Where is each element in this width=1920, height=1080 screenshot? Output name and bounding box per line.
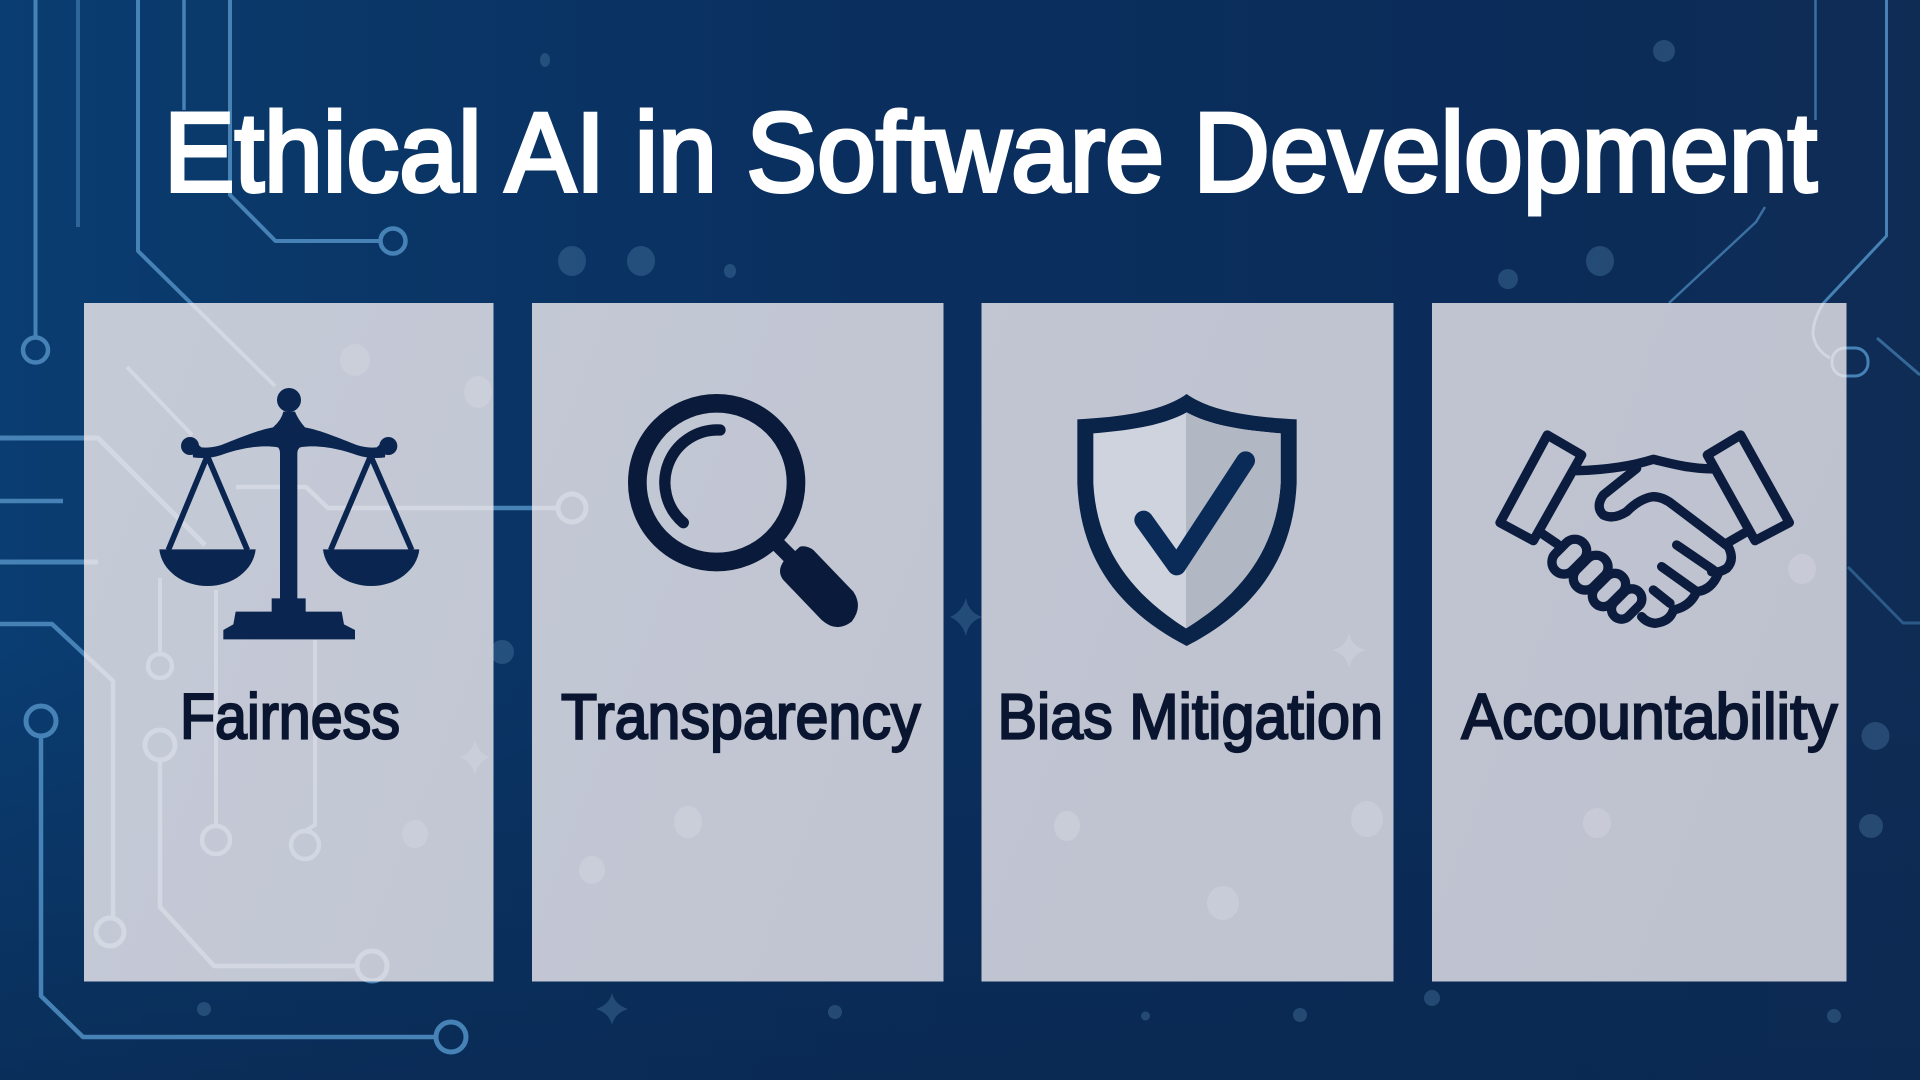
icon: handshake xyxy=(1500,435,1789,623)
title: Ethical AI in Software Development xyxy=(164,90,1817,215)
circuit lines showing through panels xyxy=(84,303,1846,982)
panel: Accountability xyxy=(1462,435,1838,752)
panel dots xyxy=(340,344,1816,920)
label: Accountability: Accountability xyxy=(1462,680,1838,752)
panel: Bias Mitigation xyxy=(998,394,1383,752)
panel backgrounds xyxy=(84,303,1846,982)
panel: Fairness xyxy=(159,388,419,752)
icon: magnifying glass xyxy=(637,403,858,627)
icon: balance scales xyxy=(159,388,419,639)
panel: Transparency xyxy=(561,403,920,752)
label: Transparency: Transparency xyxy=(561,680,920,752)
label: Fairness: Fairness xyxy=(180,680,400,752)
icon: shield with check mark xyxy=(1077,394,1297,646)
label: Bias Mitigation: Bias Mitigation xyxy=(998,680,1383,752)
